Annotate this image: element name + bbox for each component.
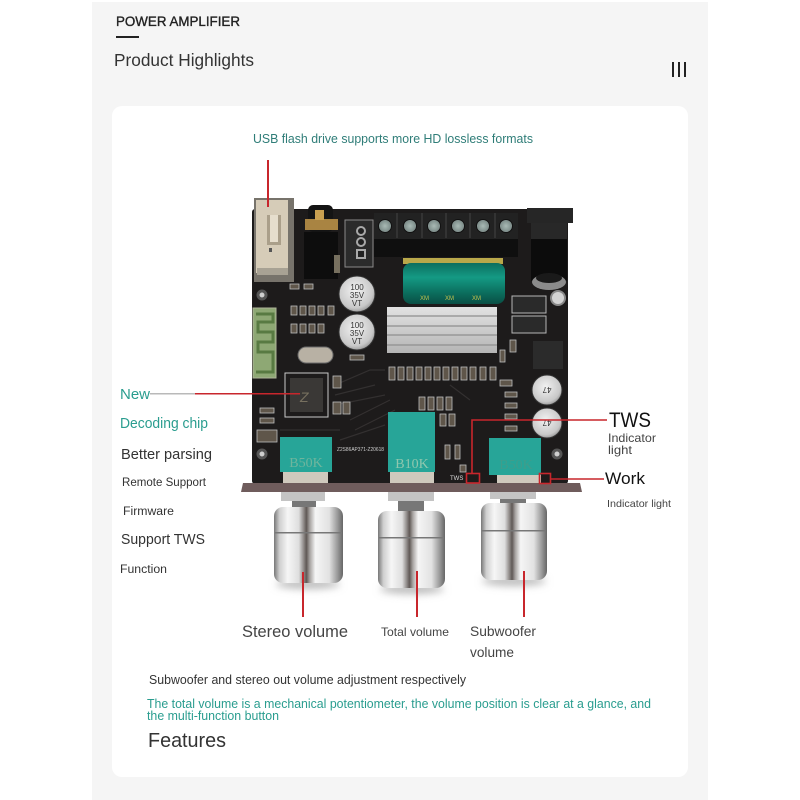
DC power jack [527,208,573,290]
aluminium capacitors: 100 [350,321,364,330]
label: stereo volume: Stereo volume [242,622,348,641]
heading: power amplifier: POWER AMPLIFIER [116,14,240,29]
arrow: work callout line [540,474,604,484]
text: potentiometer note [147,697,651,723]
MOSFETs and regulator [512,291,565,369]
aluminium capacitors: VT [352,299,362,308]
crystal [298,347,333,363]
arrow: USB callout line [267,160,269,207]
middle knob [378,511,445,588]
green electrolytic capacitor [403,258,505,304]
label: work indicator light [605,470,671,510]
small components [257,284,517,472]
audio jack [304,205,340,279]
text: potentiometer note: The total volume is a mechanical potentiometer, the volume position is clear at a glance, and [147,697,651,711]
aluminium capacitors: VT [352,337,362,346]
left potentiometer: B50K [289,456,323,471]
left feature list: Support TWS [121,532,205,548]
green electrolytic capacitor: XM [445,296,454,302]
heading: power amplifier [116,14,240,38]
left feature list: Decoding chip [120,416,208,432]
label: TWS indicator light: Indicator [608,431,656,445]
middle potentiometer: B10K [395,457,429,472]
green electrolytic capacitor: XM [472,296,481,302]
panel: white product card [112,106,688,777]
label: subwoofer volume: Subwoofer [470,623,536,639]
TWS silk label: TWS [450,476,463,482]
decoding chip: Z [299,389,309,405]
USB port [254,198,294,282]
panel: grey page background [92,2,708,800]
product photo: amplifier board [241,198,582,594]
left potentiometer [280,437,332,484]
board traces [280,370,470,440]
left feature list: Function [120,564,167,576]
middle potentiometer [388,412,435,484]
left feature list: New [120,386,150,403]
arrow: TWS callout line [466,420,607,483]
mounting holes [258,291,561,458]
arrows: knob callout lines [302,571,525,617]
left knob [274,507,343,583]
label: subwoofer volume [470,623,536,660]
nuts [281,492,536,511]
label: subwoofer volume: volume [470,644,514,660]
aluminium capacitors: 47 [542,385,551,394]
label: total volume: Total volume [381,625,449,639]
left feature list: Firmware [123,506,174,518]
circuit board [252,209,568,484]
front metal plate [241,483,582,492]
text: potentiometer note: the multi-function button [147,709,279,723]
aluminium capacitors: 100 [350,283,364,292]
right potentiometer [489,438,541,484]
terminal block [374,213,518,257]
label: TWS indicator light: TWS [609,409,651,432]
aluminium capacitors: 35V [350,291,365,300]
icon: three bars menu [672,62,686,77]
left feature list: Better parsing [121,446,212,463]
label: TWS indicator light: light [608,443,633,457]
left feature list: Remote Support [122,477,207,489]
label: work indicator light: Indicator light [607,498,671,510]
antenna [253,308,276,378]
caption: USB flash drive: USB flash drive supports more HD lossless formats [253,132,533,146]
decoding chip [285,373,328,417]
label: work indicator light: Work [605,470,646,488]
left feature list [120,386,212,576]
heading: product highlights: Product Highlights [114,50,254,70]
aluminium capacitors: 47 [542,418,551,427]
text: adjustment note: Subwoofer and stereo out volume adjustment respectively [149,673,467,687]
green electrolytic capacitor: XM [420,296,429,302]
knob shadows [276,576,546,594]
arrow: chip callout line [150,393,300,394]
right potentiometer: B50K [499,458,533,473]
aluminium capacitors [339,276,562,438]
heat sink [387,307,497,353]
three pin header [345,220,373,267]
aluminium capacitors: 35V [350,329,365,338]
label: TWS indicator light [608,409,656,457]
marking text: Z2S86AP371-Z20618 [337,447,384,453]
right knob [481,503,547,580]
heading: features: Features [148,729,226,752]
